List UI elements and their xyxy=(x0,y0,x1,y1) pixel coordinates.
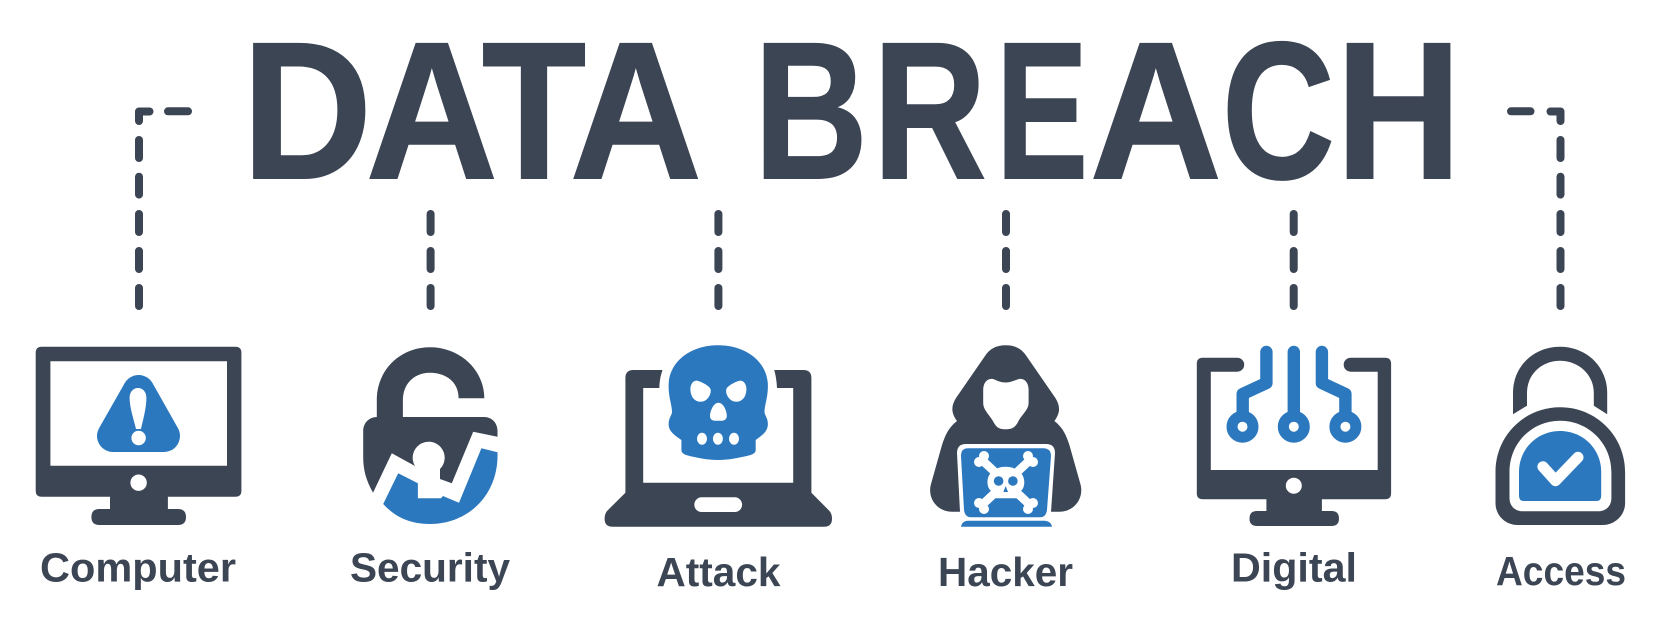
label: Security: Security xyxy=(350,545,510,591)
title: R xyxy=(873,2,987,220)
label: Digital: Digital xyxy=(1231,545,1357,591)
label: Computer: Computer xyxy=(40,545,236,591)
icon: monitor with warning xyxy=(36,347,241,525)
label: Attack: Attack xyxy=(656,549,781,595)
icon: hooded hacker with laptop xyxy=(930,345,1081,527)
title: A xyxy=(1090,2,1221,220)
dashed connector: attack xyxy=(714,214,722,306)
panel: hacker xyxy=(930,345,1081,595)
dashed connector: access xyxy=(1511,111,1560,306)
icon: padlock with check xyxy=(1496,347,1625,525)
dashed connector: digital xyxy=(1290,214,1298,306)
title: C xyxy=(1222,2,1335,220)
title: E xyxy=(996,2,1088,220)
title: H xyxy=(1336,2,1462,220)
label: Hacker: Hacker xyxy=(938,549,1073,595)
title: A xyxy=(366,2,498,220)
title: B xyxy=(754,2,868,220)
icon: broken padlock xyxy=(363,347,498,524)
title xyxy=(242,2,1462,220)
title: T xyxy=(482,2,586,220)
icon: monitor with circuit xyxy=(1197,352,1391,526)
panel: attack xyxy=(605,345,832,595)
dashed connector: hacker xyxy=(1002,214,1010,306)
panel: security xyxy=(350,347,510,591)
panel: digital xyxy=(1197,352,1391,591)
dashed connector: security xyxy=(427,214,435,306)
title: A xyxy=(570,2,701,220)
title: D xyxy=(242,2,372,220)
icon: laptop with skull xyxy=(605,345,832,527)
panel: computer xyxy=(36,347,241,591)
dashed connector: computer xyxy=(139,111,188,306)
panel: access xyxy=(1496,347,1626,594)
label: Access: Access xyxy=(1496,548,1626,594)
